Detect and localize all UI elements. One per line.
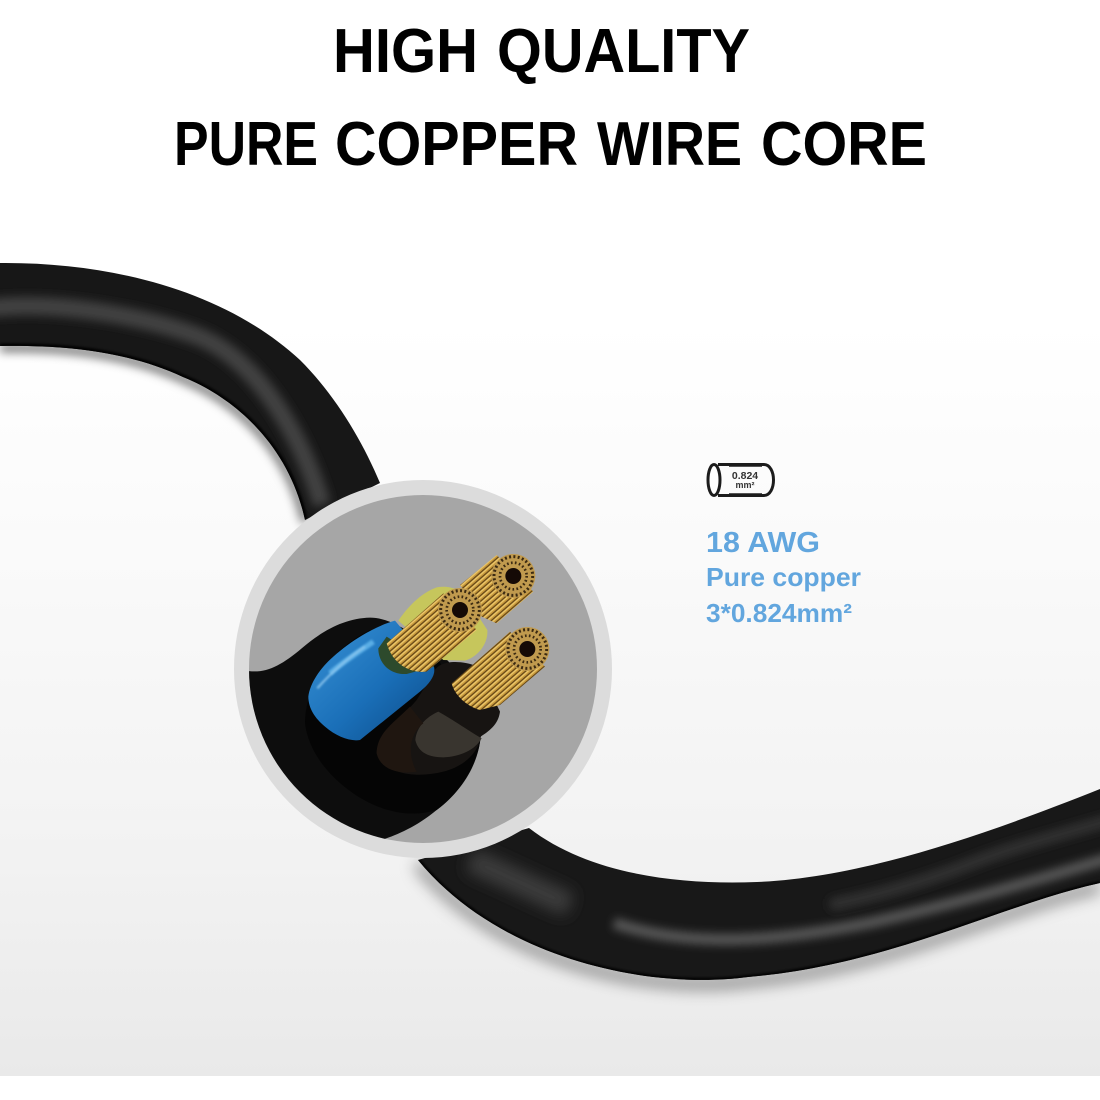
magnifier lens: cable cross-section [230,480,612,863]
cross-section drawing [249,554,550,839]
spec text: 18 AWG pure copper: 18 AWG [706,527,820,559]
blue insulated conductor [308,621,434,740]
copper strand bundle: middle [378,588,482,674]
title: QUALITY [497,17,750,86]
title: HIGH [333,17,478,86]
icon: wire cross-section 0.824 mm²: mm² [735,480,755,490]
lens grey background [249,495,597,843]
copper strand bundle: rear [460,554,535,623]
title: PURE [174,110,318,179]
inner jacket shading [305,630,481,814]
yellow insulated conductor [398,587,487,661]
copper strand bundle: front [452,627,549,710]
spec text: 18 AWG pure copper [706,527,861,628]
icon: wire cross-section 0.824 mm² [708,464,774,496]
black outer jacket [249,618,481,839]
upper black cable [0,263,380,522]
title [174,17,927,179]
lower black cable [418,789,1100,984]
title: COPPER [335,110,578,179]
icon: wire cross-section 0.824 mm²: 0.824 [732,470,758,482]
title: WIRE [597,110,742,179]
spec text: 18 AWG pure copper: Pure copper [706,562,861,592]
lens outer ring [234,480,612,858]
spec text: 18 AWG pure copper: 3*0.824mm² [706,598,852,628]
black insulated conductor [377,662,500,775]
title: CORE [761,110,927,179]
